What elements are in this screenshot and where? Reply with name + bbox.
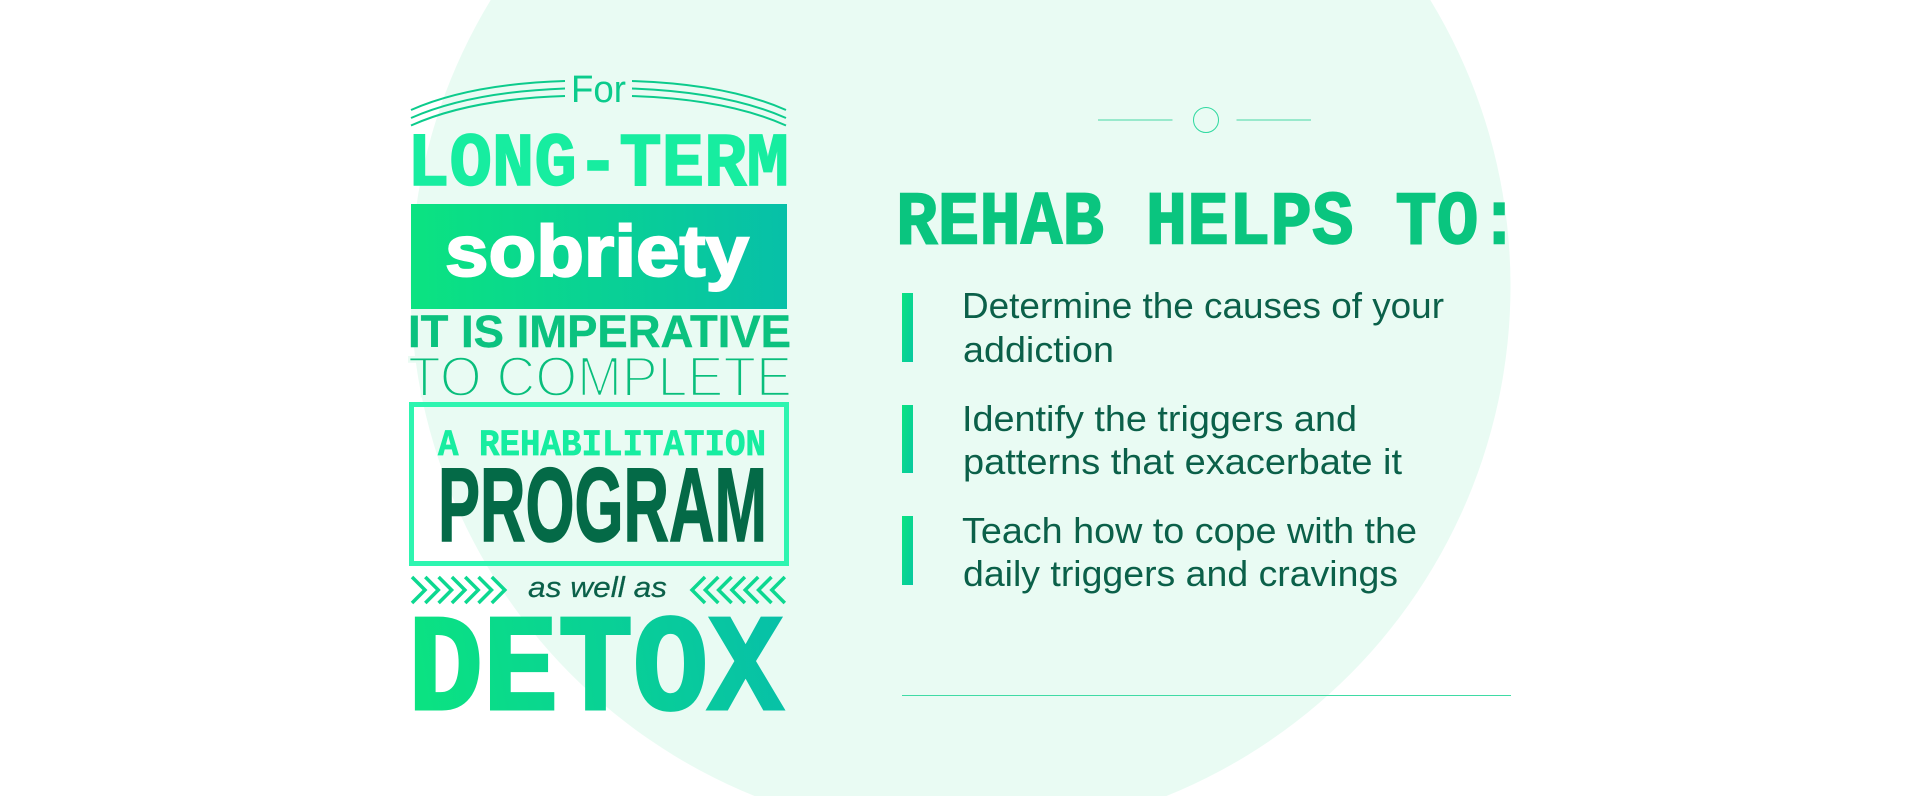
divider with circle xyxy=(1098,108,1311,132)
DETOX heading: DETOX xyxy=(408,595,783,751)
as well as text: as well as xyxy=(528,572,667,604)
LONG-TERM heading: LONG-TERM xyxy=(407,122,789,208)
TO COMPLETE text: TO COMPLETE xyxy=(408,345,792,409)
background circle xyxy=(410,0,1511,796)
PROGRAM text: PROGRAM xyxy=(438,447,767,564)
panel: left typographic poster xyxy=(407,69,792,751)
chevrons left xyxy=(412,577,505,603)
arcs and For heading xyxy=(411,69,786,126)
sobriety banner xyxy=(411,204,787,309)
rehabilitation program box xyxy=(412,404,786,564)
chevrons right xyxy=(692,577,785,603)
list item 2: Identify the triggers and xyxy=(962,398,1357,439)
list item 2: patterns that exacerbate it xyxy=(963,441,1402,482)
list item 3: Teach how to cope with the xyxy=(962,510,1417,551)
IT IS IMPERATIVE text: IT IS IMPERATIVE xyxy=(408,306,791,357)
A REHABILITATION text: A REHABILITATION xyxy=(438,425,766,467)
sobriety banner: sobriety xyxy=(445,212,749,292)
bottom rule xyxy=(902,694,1511,696)
list item 1: addiction xyxy=(963,329,1114,370)
list item 3: daily triggers and cravings xyxy=(963,553,1398,594)
arcs and For heading: For xyxy=(571,69,626,111)
list item 3 xyxy=(902,510,1417,594)
panel: right benefits list xyxy=(896,108,1520,696)
list item 1 xyxy=(902,285,1444,370)
list item 1: Determine the causes of your xyxy=(962,285,1444,326)
list item 2 xyxy=(902,398,1402,482)
heading: rehab helps to: REHAB HELPS TO: xyxy=(896,180,1520,266)
